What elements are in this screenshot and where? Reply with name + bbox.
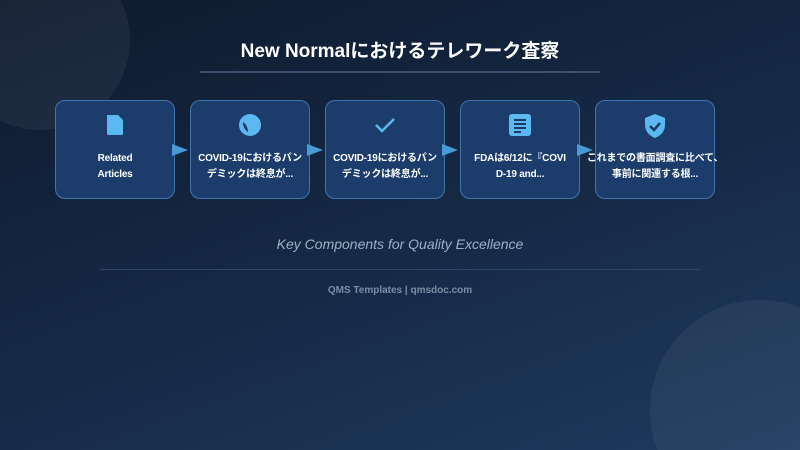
step 3: COVID-19におけるパン	[333, 153, 437, 164]
step 5: これまでの書面調査に比べて、	[587, 153, 723, 164]
icon: globe	[239, 114, 261, 136]
step 1: related articles	[55, 100, 175, 199]
step 1: related articles: Articles	[97, 168, 133, 180]
arrow 4	[577, 144, 593, 156]
step 4: D-19 and...	[496, 168, 544, 180]
icon: shield check	[645, 114, 665, 138]
icon: document	[107, 115, 123, 135]
step 4: FDAは6/12に『COVI	[474, 153, 566, 164]
arrow 1	[172, 144, 188, 156]
title: New Normalにおけるテレワーク査察	[241, 41, 559, 62]
step 3: デミックは終息が...	[342, 168, 428, 180]
step 2: デミックは終息が...	[207, 168, 293, 180]
arrow 3	[442, 144, 458, 156]
arrow 2	[307, 144, 323, 156]
step 4	[460, 100, 580, 199]
step 2: COVID-19におけるパン	[198, 153, 302, 164]
icon: check	[375, 118, 395, 133]
step 2	[190, 100, 310, 199]
icon: note	[509, 114, 531, 136]
footer: QMS Templates | qmsdoc.com	[328, 285, 472, 296]
step 3	[325, 100, 445, 199]
subtitle: Key Components for Quality Excellence	[277, 236, 523, 252]
step 5: 事前に関連する根...	[612, 168, 698, 180]
step 1: related articles: Related	[98, 153, 132, 164]
step 5	[595, 100, 715, 199]
